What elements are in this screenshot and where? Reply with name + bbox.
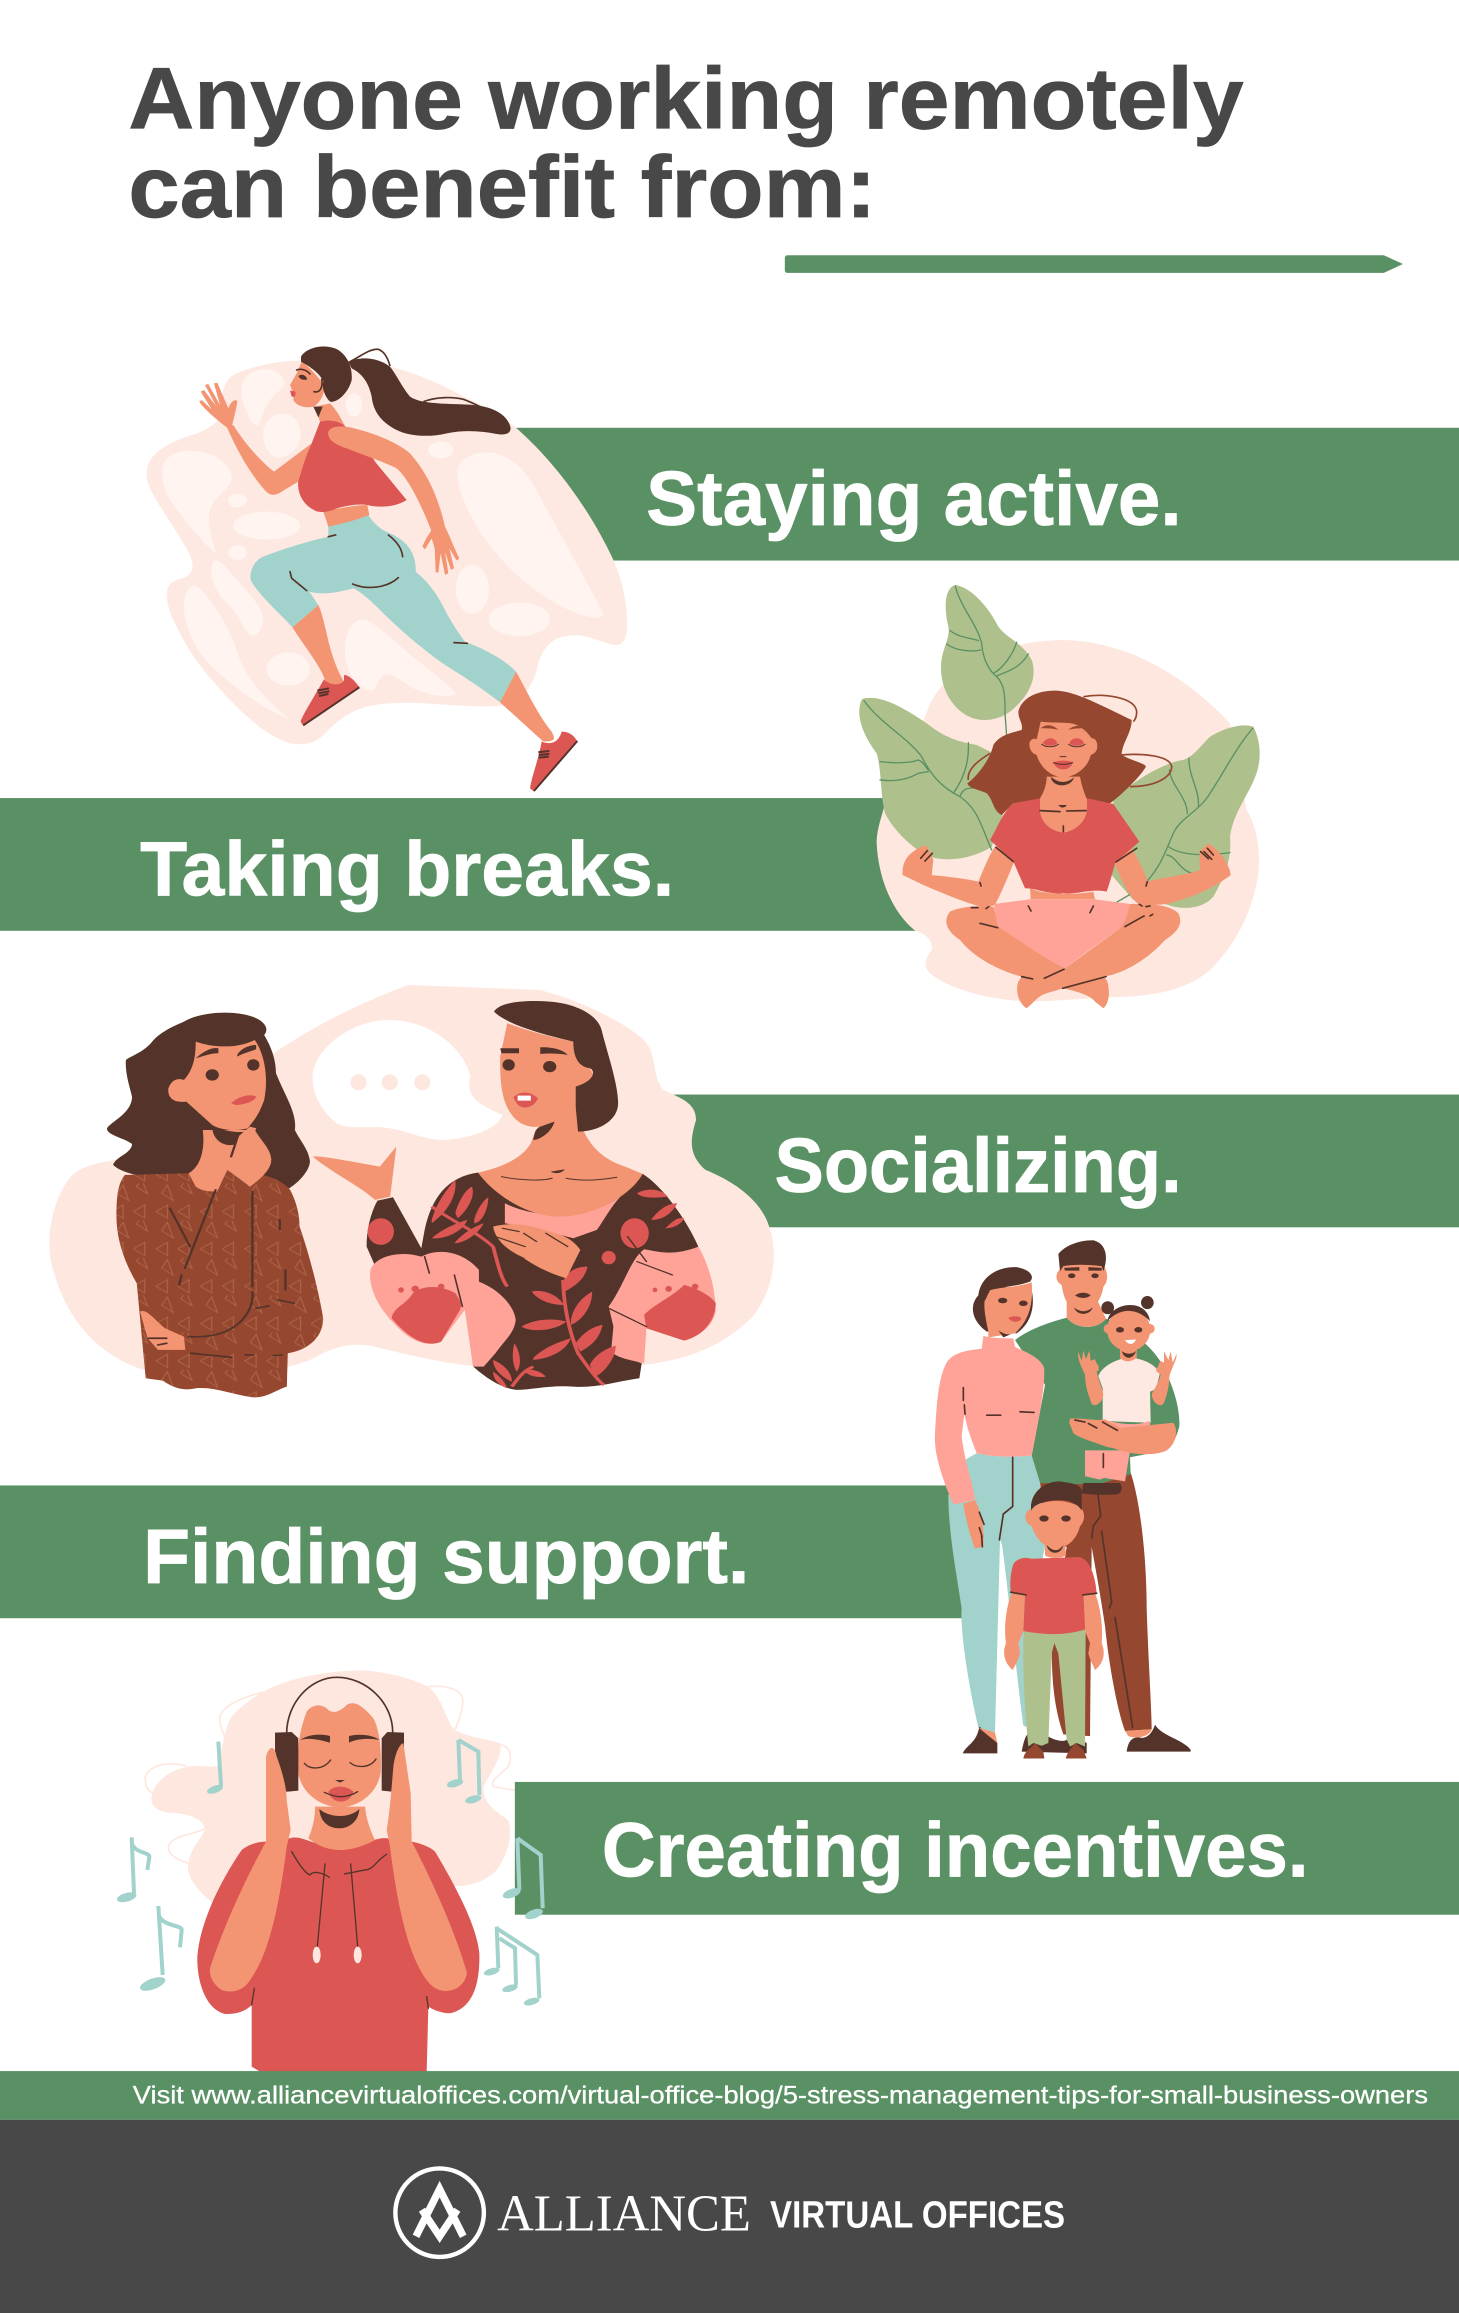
drawstrings: [252, 1852, 428, 2008]
woman pants: [948, 1453, 1045, 1733]
man forearm: [1069, 1418, 1176, 1454]
footer band: [0, 2120, 1459, 2313]
illustration: woman running: [147, 347, 627, 792]
boy: [1004, 1481, 1104, 1759]
illustration: woman meditating: [859, 585, 1260, 1008]
woman head: [973, 1267, 1033, 1337]
forearms: [210, 1748, 291, 1991]
arms: [903, 846, 1014, 908]
title: Anyone working remotely: [128, 50, 1244, 147]
face and hair: [290, 362, 324, 407]
banner: Taking breaks: [0, 798, 918, 931]
right woman: [313, 1001, 716, 1390]
pants: [250, 515, 516, 702]
shorts: [994, 899, 1130, 968]
back leg: [292, 605, 344, 685]
chest and neck: [505, 1197, 620, 1238]
banner: Finding support: [0, 1485, 962, 1618]
banner: Taking breaks: Taking breaks.: [140, 827, 674, 912]
ponytail: [348, 358, 511, 436]
legs: [946, 904, 1180, 1008]
sweater: [197, 1838, 479, 2072]
neck and face: [1040, 777, 1087, 832]
banner: Creating incentives: Creating incentives.: [602, 1808, 1309, 1893]
leaves: [941, 585, 1034, 720]
neck: [308, 1807, 375, 1850]
arrow: title underline: [785, 255, 1403, 273]
title: can benefit from:: [128, 139, 876, 236]
speech bubble: [313, 1020, 503, 1140]
front calf and shoe: [500, 672, 554, 742]
banner: Socializing: [649, 1095, 1459, 1227]
detail lines: [963, 1388, 1133, 1728]
logo: Alliance Virtual Offices: VIRTUAL OFFICES: [770, 2193, 1065, 2236]
girl: [1078, 1296, 1177, 1495]
banner: Creating incentives: [515, 1782, 1459, 1915]
illustration: family: [935, 1240, 1191, 1759]
midriff and top: [323, 505, 369, 527]
man pants: [1040, 1471, 1152, 1736]
shoes: [963, 1725, 1191, 1753]
banner: Finding support: Finding support.: [143, 1515, 749, 1600]
illustration background: music listener blob: [145, 1671, 522, 1903]
face and hair: [500, 1023, 594, 1127]
logo: Alliance Virtual Offices: [395, 2168, 1065, 2257]
woman sweater: [935, 1336, 1044, 1504]
hand on chest: [493, 1224, 580, 1278]
left woman: [107, 1013, 323, 1397]
title: [128, 50, 1244, 236]
face: [298, 1703, 381, 1807]
banner: Staying active: Staying active.: [646, 457, 1182, 542]
arms: [227, 425, 312, 495]
headphones: [287, 1677, 393, 1733]
man shirt: [1015, 1318, 1179, 1485]
footer link bar: [0, 2071, 1459, 2120]
illustration: woman listening to music: [116, 1677, 544, 2072]
man head: [1056, 1240, 1107, 1327]
logo: Alliance Virtual Offices: ALLIANCE: [497, 2185, 751, 2242]
illustration: two women talking: [49, 985, 774, 1397]
shirt: [990, 798, 1139, 894]
music notes: [116, 1740, 544, 2007]
banner: Staying active: [502, 428, 1459, 561]
hair: [968, 695, 1172, 787]
footer link bar: Visit www.alliancevirtualoffices.com/virtual-office-blog/5-stress-management-tips-for-small-business-owners: [133, 2082, 1428, 2110]
banner: Socializing: Socializing.: [774, 1124, 1182, 1209]
pink sleeves: [370, 1252, 516, 1367]
